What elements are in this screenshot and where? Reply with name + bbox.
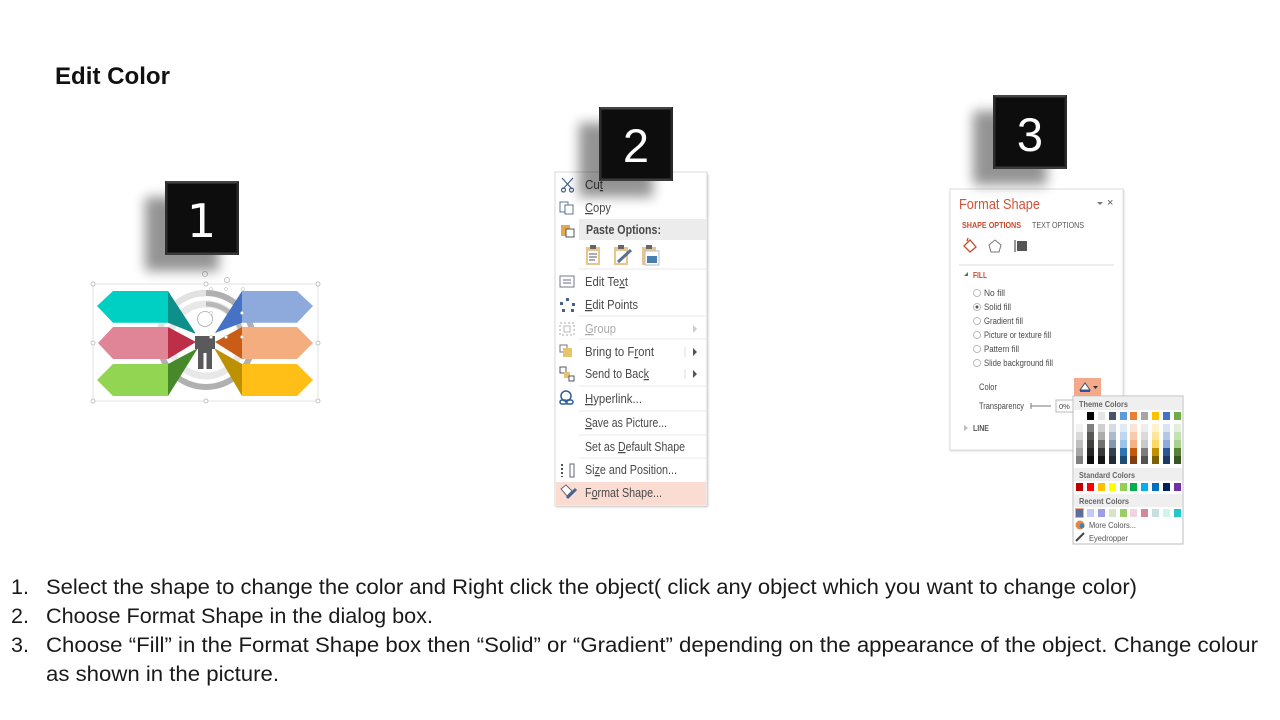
pane tabs: TEXT OPTIONS xyxy=(1032,220,1084,230)
fill option labels: Solid fill xyxy=(984,302,1011,312)
recent colors header: Recent Colors xyxy=(1079,496,1129,506)
instructions list: as shown in the picture. xyxy=(46,662,279,686)
icon: format shape xyxy=(561,485,576,498)
fill option labels: Slide background fill xyxy=(984,358,1053,368)
teal arrow xyxy=(97,291,196,334)
icon: send to back xyxy=(560,367,574,381)
fill option labels: No fill xyxy=(984,288,1005,298)
fill section heading: FILL xyxy=(973,270,987,280)
icon: scissors xyxy=(562,178,574,192)
panel: step 3 format shape pane xyxy=(950,189,1124,451)
theme color shades xyxy=(1076,424,1181,464)
menu labels: Save as Picture... xyxy=(585,416,667,430)
icon: copy xyxy=(560,202,573,214)
pane tabs xyxy=(962,220,1084,230)
icon: edit points xyxy=(560,298,575,312)
instructions list: Select the shape to change the color and Right click the object( click any object which you want to change color) xyxy=(46,575,1137,599)
menu labels xyxy=(585,178,685,500)
circular maze rings xyxy=(159,293,253,387)
line section: LINE xyxy=(973,424,990,433)
standard colors header xyxy=(1074,468,1182,481)
selection frame xyxy=(91,272,320,403)
eyedropper option xyxy=(1076,533,1128,543)
badge 3: 3 xyxy=(1017,108,1043,161)
menu labels: Edit Points xyxy=(585,298,638,312)
recent colors header xyxy=(1074,494,1182,507)
menu labels: Hyperlink... xyxy=(585,392,642,406)
instructions list: 3. xyxy=(11,633,29,657)
menu labels: Group xyxy=(585,322,616,336)
color row: Color xyxy=(979,382,997,392)
badge 3 xyxy=(973,95,1067,185)
icon: size and position xyxy=(562,464,574,477)
eyedropper option: Eyedropper xyxy=(1089,533,1128,543)
icon: size properties xyxy=(1014,240,1027,252)
color row xyxy=(979,378,1101,396)
theme colors header xyxy=(1074,397,1182,410)
icon: bring to front xyxy=(560,345,572,357)
green arrow xyxy=(97,348,198,396)
pane controls: × xyxy=(1107,197,1113,209)
pink arrow xyxy=(98,327,196,359)
instructions list: 2. xyxy=(11,604,29,628)
badge 2: 2 xyxy=(623,119,649,172)
panel: step 2 context menu xyxy=(555,172,708,507)
fill section heading xyxy=(964,270,987,280)
theme colors header: Theme Colors xyxy=(1079,399,1128,409)
icon: edit text xyxy=(560,276,574,287)
standard color swatches xyxy=(1076,483,1181,491)
badge 1 xyxy=(145,181,239,271)
badge 1: 1 xyxy=(187,194,216,248)
pane box xyxy=(950,189,1124,451)
title: Edit Color xyxy=(55,63,170,90)
recent color swatches xyxy=(1075,508,1181,518)
instructions list: Choose Format Shape in the dialog box. xyxy=(46,604,433,628)
instructions list xyxy=(11,575,1258,686)
theme color swatches xyxy=(1076,412,1181,420)
menu labels: Bring to Front xyxy=(585,345,654,359)
orange arrow xyxy=(215,327,313,359)
pane controls xyxy=(1097,197,1113,209)
yellow arrow xyxy=(214,348,313,396)
instructions list: 1. xyxy=(11,575,29,599)
menu labels: Set as Default Shape xyxy=(585,440,685,454)
person figure xyxy=(194,312,216,369)
popup box xyxy=(1073,396,1183,544)
menu labels: Copy xyxy=(585,201,612,215)
icon: hyperlink xyxy=(560,391,573,404)
fill option labels: Pattern fill xyxy=(984,344,1019,354)
menu separators xyxy=(579,269,706,458)
pane divider xyxy=(959,264,1114,266)
icon: paste xyxy=(561,225,574,237)
menu labels: Edit Text xyxy=(585,275,628,289)
menu labels: Format Shape... xyxy=(585,486,662,500)
menu labels: Size and Position... xyxy=(585,463,677,477)
panel: color picker popup xyxy=(1073,396,1183,544)
line section xyxy=(964,424,990,433)
icon: fill bucket xyxy=(964,238,976,252)
menu box xyxy=(555,172,708,507)
standard colors header: Standard Colors xyxy=(1079,470,1135,480)
instructions list: Choose “Fill” in the Format Shape box then “Solid” or “Gradient” depending on the appearance of the object. Change colour xyxy=(46,633,1258,657)
menu labels: Cut xyxy=(585,178,603,192)
menu labels: Paste Options: xyxy=(586,223,661,237)
more colors option: More Colors... xyxy=(1089,520,1136,530)
panel: step 1 selected graphic xyxy=(91,272,320,403)
paste options highlight xyxy=(579,219,706,240)
fill option labels: Gradient fill xyxy=(984,316,1023,326)
transparency row xyxy=(979,400,1073,412)
icons: paste options xyxy=(586,245,659,265)
pane tabs: SHAPE OPTIONS xyxy=(962,220,1021,230)
transparency row: 0% xyxy=(1059,402,1070,411)
shape handles xyxy=(210,288,244,338)
format shape highlight xyxy=(556,482,706,505)
pane title: Format Shape xyxy=(959,197,1040,213)
icon: pentagon xyxy=(989,240,1001,252)
fill option labels xyxy=(984,288,1053,368)
badge 2 xyxy=(579,107,673,197)
fill radio options xyxy=(974,290,980,366)
blue arrow xyxy=(215,291,313,333)
fill option labels: Picture or texture fill xyxy=(984,330,1051,340)
icon: group xyxy=(560,323,574,335)
transparency row: Transparency xyxy=(979,401,1024,411)
submenu arrows xyxy=(685,325,697,379)
menu labels: Send to Back xyxy=(585,367,650,381)
